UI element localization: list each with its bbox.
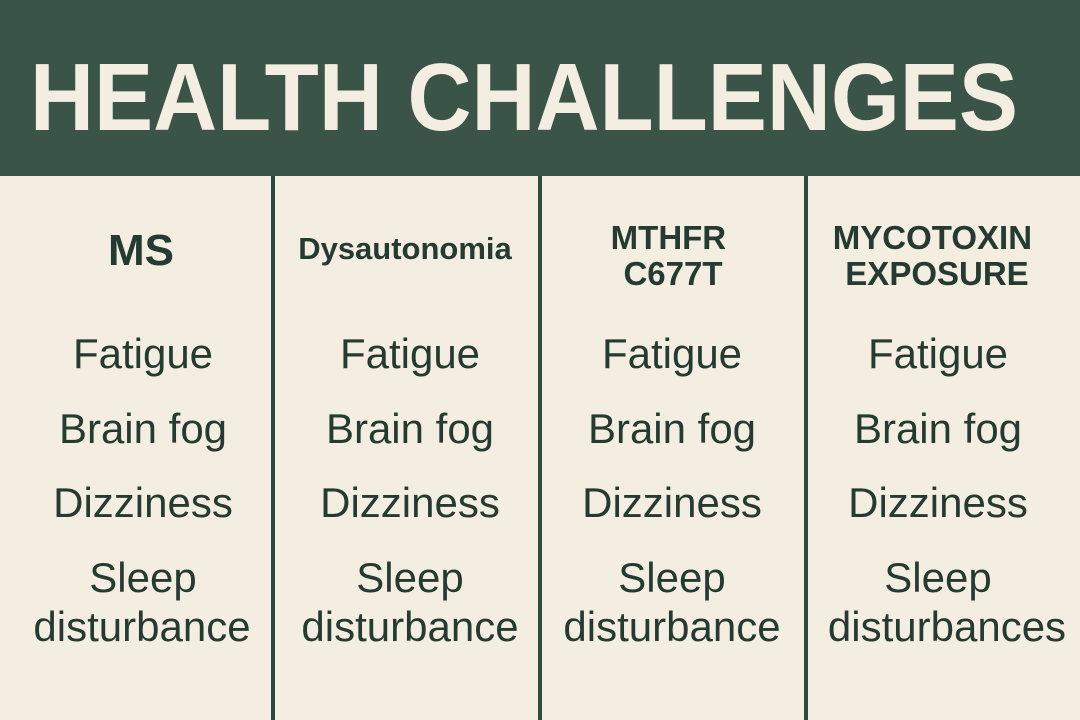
column: MS [33,226,251,650]
symptom list: MS: disturbance [33,603,251,650]
symptom list: MS: Fatigue [73,330,213,377]
heading: Mycotoxin exposure: EXPOSURE [845,255,1029,292]
column: Mycotoxin exposure [828,219,1066,650]
heading: Dysautonomia: Dysautonomia [298,231,513,266]
symptom list: Mycotoxin: Fatigue [868,330,1008,377]
symptom list: Dysautonomia: Fatigue [340,330,480,377]
column: MTHFR C677T [563,219,781,650]
header band [0,0,1080,176]
symptom list: Mycotoxin: Sleep [884,554,992,601]
symptom list: MTHFR [563,330,781,650]
symptom list: MS: Dizziness [53,479,233,526]
symptom list: Mycotoxin: disturbances [828,603,1066,650]
heading: MS: MS [108,226,174,275]
symptom list: MS [33,330,251,650]
symptom list: MTHFR: Fatigue [602,330,742,377]
symptom list: Mycotoxin: Dizziness [848,479,1028,526]
symptom list: MS: Sleep [89,554,197,601]
symptom list: MS: Brain fog [59,405,227,452]
symptom list: MTHFR: Dizziness [582,479,762,526]
symptom list: Mycotoxin: Brain fog [854,405,1022,452]
column: Dysautonomia [298,231,519,650]
heading: MTHFR C677T: MTHFR [611,219,726,256]
title: HEALTH CHALLENGES [30,44,1018,151]
symptom list: Dysautonomia: disturbance [301,603,519,650]
symptom list: Dysautonomia: Brain fog [326,405,494,452]
heading: MTHFR C677T: C677T [623,255,723,292]
symptom list: Dysautonomia: Sleep [356,554,464,601]
symptom list: Mycotoxin [828,330,1066,650]
symptom list: MTHFR: Sleep [618,554,726,601]
symptom list: MTHFR: disturbance [563,603,781,650]
symptom list: Dysautonomia: Dizziness [320,479,500,526]
symptom list: MTHFR: Brain fog [588,405,756,452]
symptom list: Dysautonomia [301,330,519,650]
heading: Mycotoxin exposure: MYCOTOXIN [833,219,1032,256]
